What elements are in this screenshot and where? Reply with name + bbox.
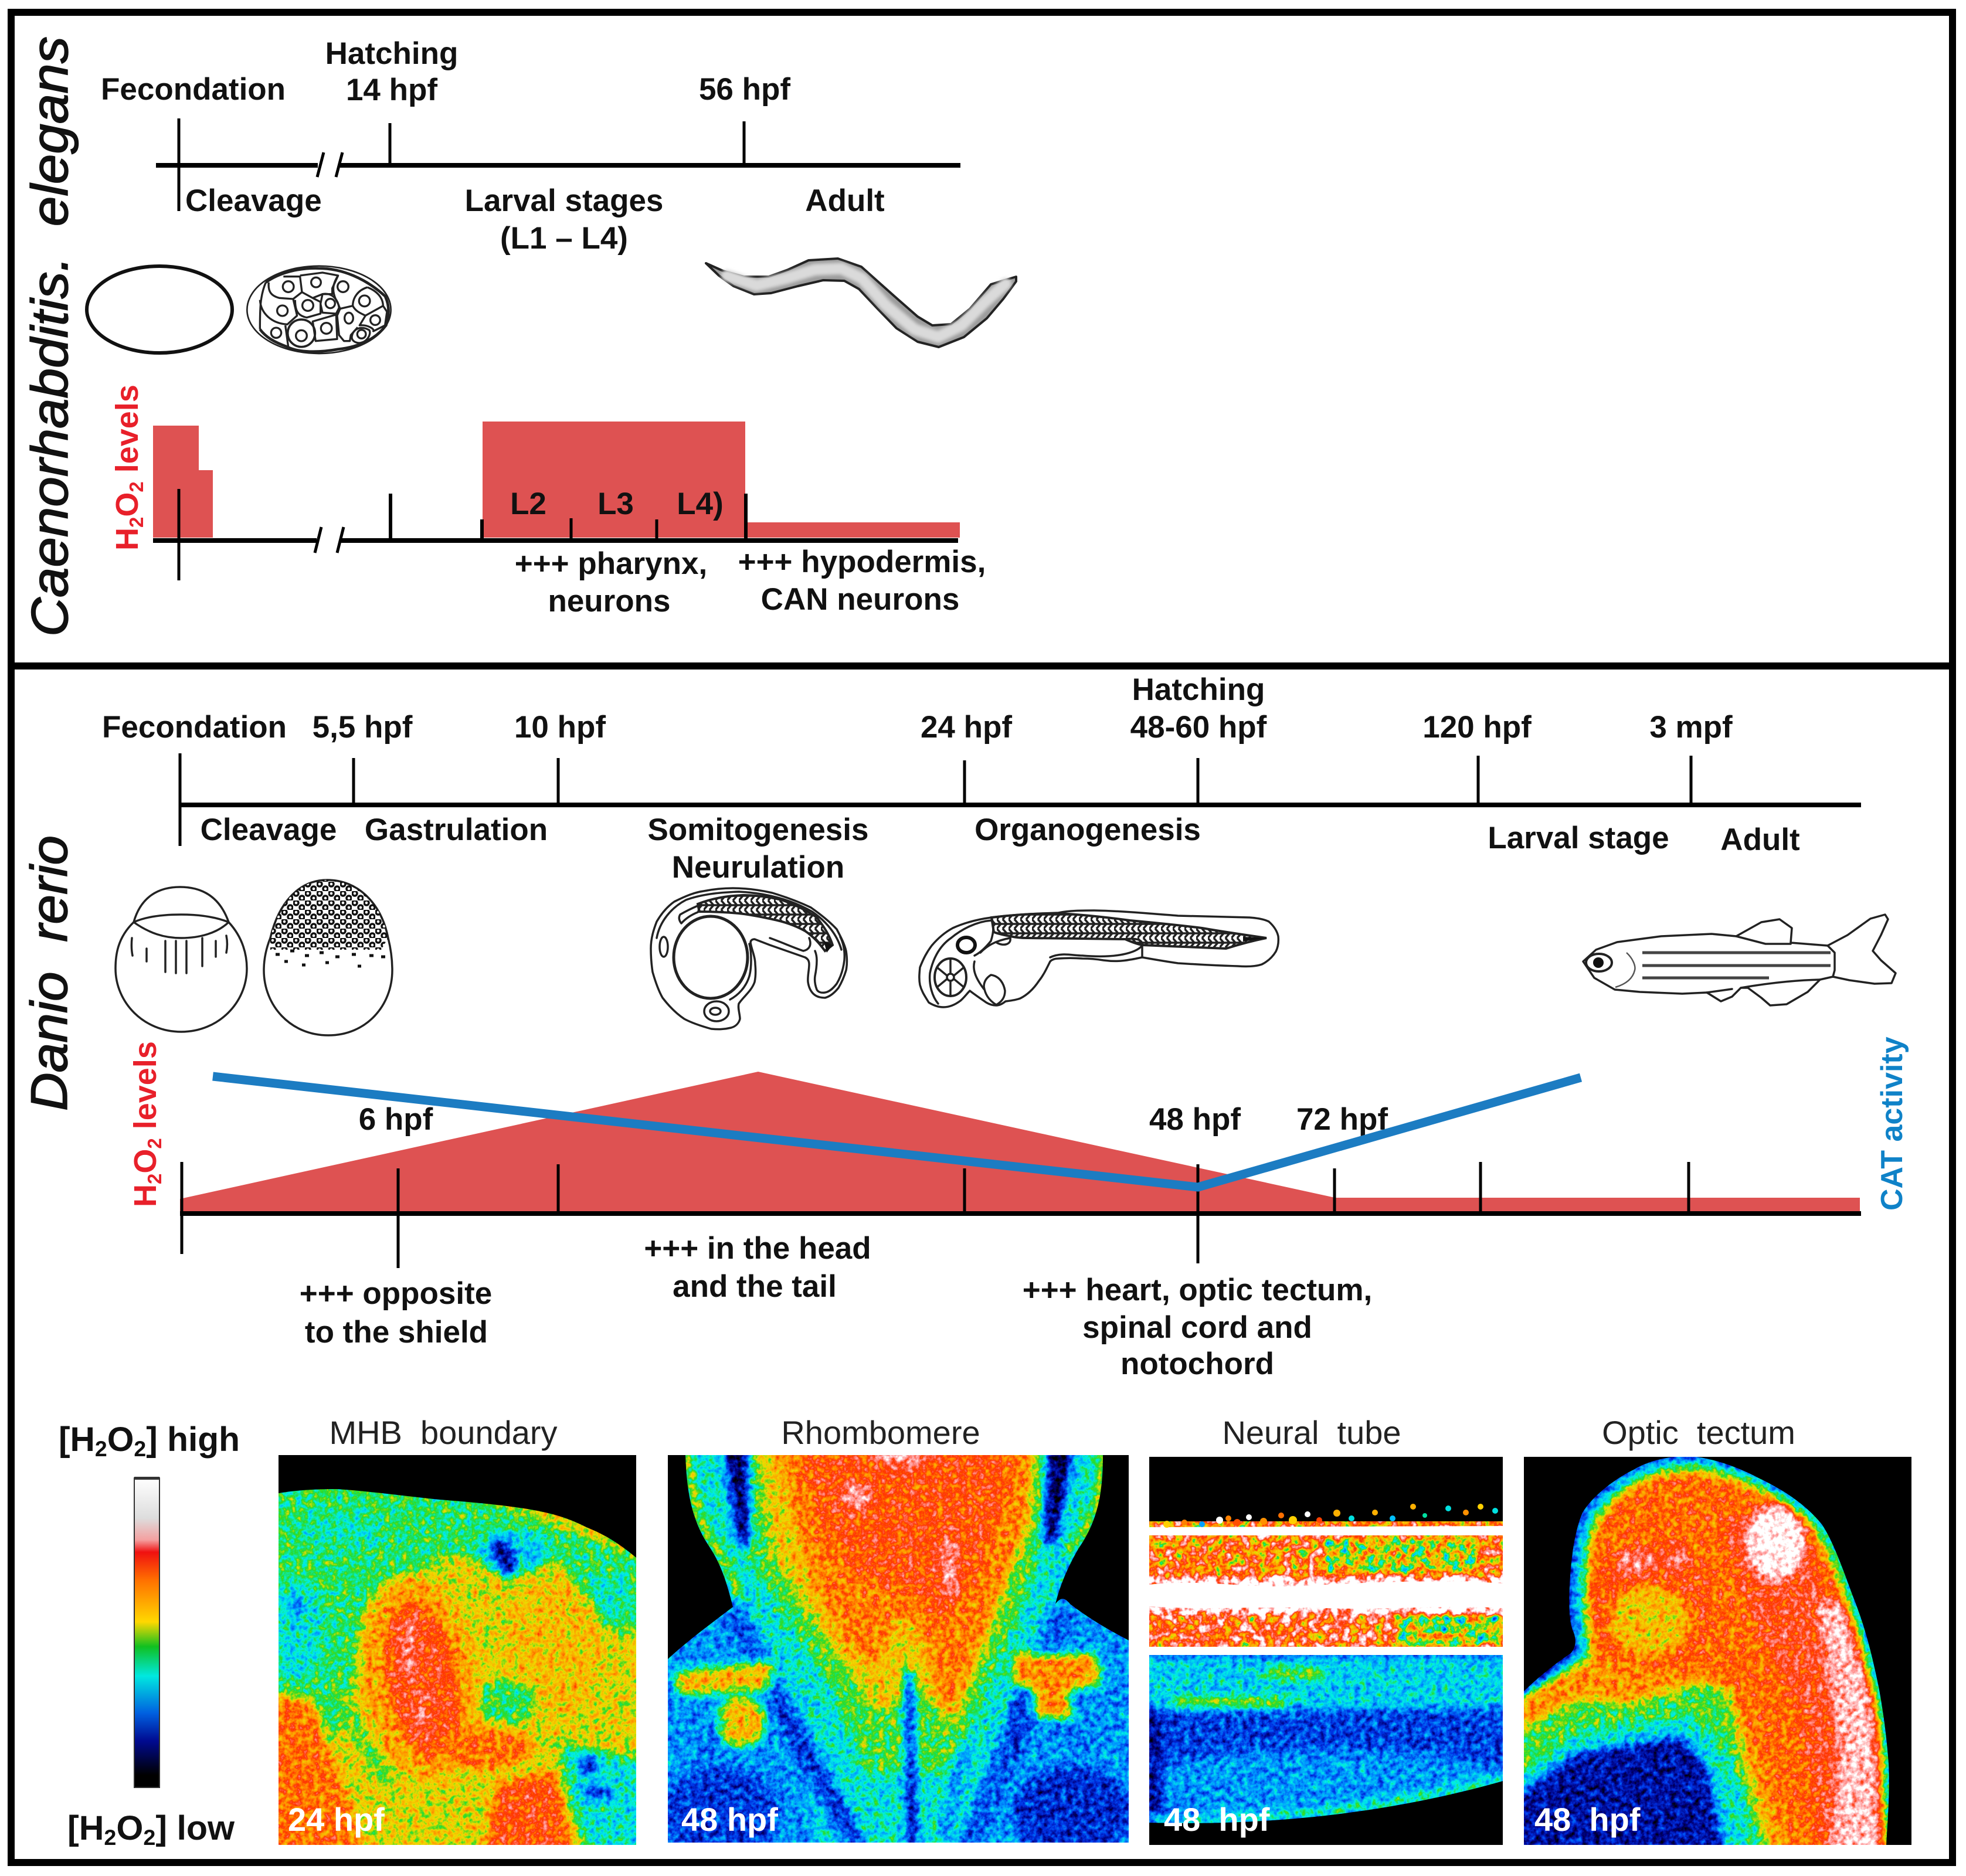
- timeline: C. elegans stages: Adult: [805, 183, 885, 218]
- heatmap panel: Neural tube: 48 hpf: [1164, 1801, 1270, 1838]
- legend: H2O2 colour scale: 2: [95, 1437, 107, 1461]
- timeline: zebrafish stages: 48-60 hpf: [1130, 710, 1267, 745]
- timeline: zebrafish stages: 10 hpf: [514, 710, 606, 745]
- timeline: C. elegans stages: Larval stages: [465, 183, 663, 218]
- timeline: C. elegans stages: Cleavage: [185, 183, 322, 218]
- chart: H2O2 levels and CAT activity in zebrafish: [128, 1036, 1909, 1381]
- heatmap panel: Optic tectum: [1500, 1414, 1935, 1868]
- timeline: zebrafish stages: 5,5 hpf: [313, 710, 413, 745]
- timeline: zebrafish stages: Cleavage: [201, 813, 337, 847]
- heatmap panel: Neural tube: [1126, 1414, 1526, 1873]
- chart: H2O2 levels and CAT activity in zebrafish: notochord: [1120, 1347, 1274, 1381]
- timeline: zebrafish stages: Fecondation: [102, 710, 287, 745]
- panel: Danio rerio: [20, 672, 1909, 1381]
- timeline: zebrafish stages: [102, 672, 1861, 885]
- timeline: zebrafish stages: Adult: [1720, 823, 1800, 857]
- speckles above the neural tube: [1163, 1504, 1498, 1528]
- chart: H2O2 levels and CAT activity in zebrafish: and the tail: [673, 1269, 837, 1304]
- axis label: H2O2 levels: levels: [110, 385, 145, 481]
- axis label: H2O2 levels: 2: [125, 481, 147, 492]
- chart: H2O2 levels and CAT activity in zebrafish: to the shield: [305, 1315, 488, 1350]
- axis label: H2O2 levels: O: [110, 492, 145, 517]
- panel: Caenorhabditis elegans: [21, 36, 1016, 637]
- legend: H2O2 colour scale: [59, 1420, 240, 1850]
- axis label: CAT activity: CAT activity: [1875, 1036, 1909, 1211]
- icon: adult worm: [706, 259, 1016, 347]
- chart: H2O2 levels C. elegans: L3: [597, 487, 634, 521]
- chart: H2O2 levels and CAT activity in zebrafish: 48 hpf: [1149, 1102, 1241, 1137]
- legend: H2O2 colour scale: ] low: [155, 1809, 235, 1847]
- timeline: zebrafish stages: 120 hpf: [1422, 710, 1532, 745]
- heatmap panel: Rhombomere: [644, 1414, 1152, 1868]
- chart: H2O2 levels C. elegans: L2: [510, 487, 546, 521]
- chart: H2O2 levels C. elegans: +++ hypodermis,: [738, 545, 986, 579]
- timeline: C. elegans stages: 56 hpf: [699, 72, 790, 107]
- chart: H2O2 levels and CAT activity in zebrafish: +++ heart, optic tectum,: [1023, 1273, 1372, 1307]
- chart: H2O2 levels and CAT activity in zebrafish: 72 hpf: [1296, 1102, 1388, 1137]
- axis label: H2O2 levels: H: [110, 528, 145, 550]
- heatmap panel: MHB boundary: 24 hpf: [288, 1801, 385, 1838]
- legend: H2O2 colour scale: 2: [134, 1437, 146, 1461]
- heatmap panel: Neural tube: Neural tube: [1222, 1414, 1401, 1451]
- icon: cleaving embryo: [247, 266, 391, 354]
- heatmap panel: Rhombomere: Rhombomere: [781, 1414, 980, 1451]
- legend: H2O2 colour scale: O: [116, 1809, 143, 1847]
- timeline: C. elegans stages: (L1 – L4): [500, 221, 628, 256]
- heatmap panel: Optic tectum: Optic tectum: [1602, 1414, 1795, 1451]
- heatmap panel: MHB boundary: MHB boundary: [329, 1414, 558, 1451]
- timeline: C. elegans stages: Fecondation: [101, 72, 286, 107]
- timeline: C. elegans stages: [101, 36, 960, 256]
- axis label: H2O2 levels: 2: [144, 1174, 165, 1184]
- chart: H2O2 levels and CAT activity in zebrafish: +++ opposite: [300, 1276, 492, 1311]
- axis label: H2O2 levels: H: [128, 1184, 163, 1207]
- legend: H2O2 colour scale: 2: [143, 1826, 155, 1850]
- legend: H2O2 colour scale: ] high: [146, 1420, 240, 1459]
- chart: H2O2 levels C. elegans: +++ pharynx,: [515, 546, 707, 581]
- legend: H2O2 colour scale: 2: [104, 1826, 116, 1850]
- axis label: H2O2 levels: 2: [144, 1138, 165, 1149]
- chart: H2O2 levels C. elegans: [110, 385, 986, 618]
- chart: H2O2 levels C. elegans: CAN neurons: [761, 582, 959, 617]
- chart: H2O2 levels C. elegans: neurons: [548, 584, 671, 618]
- line: CAT activity: [213, 1076, 1581, 1187]
- timeline: zebrafish stages: Neurulation: [672, 850, 844, 885]
- chart: H2O2 levels and CAT activity in zebrafish: +++ in the head: [644, 1231, 871, 1266]
- heatmap panel: MHB boundary: [255, 1414, 660, 1868]
- legend: H2O2 colour scale: [H: [59, 1420, 94, 1459]
- timeline: zebrafish stages: Gastrulation: [365, 813, 548, 847]
- chart: H2O2 levels and CAT activity in zebrafish: 6 hpf: [359, 1102, 433, 1137]
- timeline: zebrafish stages: Organogenesis: [974, 813, 1201, 847]
- icon: gastrula embryo: [264, 876, 393, 1035]
- timeline: C. elegans stages: 14 hpf: [346, 73, 437, 107]
- timeline: zebrafish stages: 3 mpf: [1649, 710, 1733, 745]
- legend: H2O2 colour scale: [H: [67, 1809, 103, 1847]
- icon: somitogenesis embryo: [651, 888, 847, 1029]
- icon: single-cell egg: [87, 266, 232, 353]
- axis label: H2O2 levels: 2: [125, 517, 147, 528]
- legend: H2O2 colour scale: O: [107, 1420, 134, 1459]
- timeline: zebrafish stages: 24 hpf: [921, 710, 1012, 745]
- heatmap panel: Optic tectum: 48 hpf: [1534, 1801, 1641, 1838]
- axis label: H2O2 levels: levels: [128, 1041, 163, 1138]
- heatmap panel: Rhombomere: 48 hpf: [681, 1801, 778, 1838]
- icon: organogenesis embryo: [919, 910, 1278, 1007]
- timeline: zebrafish stages: Hatching: [1132, 672, 1265, 707]
- species title: C. elegans: Caenorhabditis. elegans: [21, 36, 79, 637]
- timeline: zebrafish stages: Somitogenesis: [648, 813, 868, 847]
- timeline: zebrafish stages: Larval stage: [1488, 821, 1669, 855]
- timeline: C. elegans stages: Hatching: [325, 36, 458, 71]
- icon: cleavage embryo: [116, 887, 247, 1032]
- chart: H2O2 levels and CAT activity in zebrafish: spinal cord and: [1082, 1310, 1312, 1345]
- icon: adult zebrafish: [1583, 915, 1896, 1005]
- species title: Danio rerio: Danio rerio: [20, 835, 78, 1111]
- chart: H2O2 levels C. elegans: L4): [677, 487, 724, 521]
- axis label: H2O2 levels: O: [128, 1149, 163, 1174]
